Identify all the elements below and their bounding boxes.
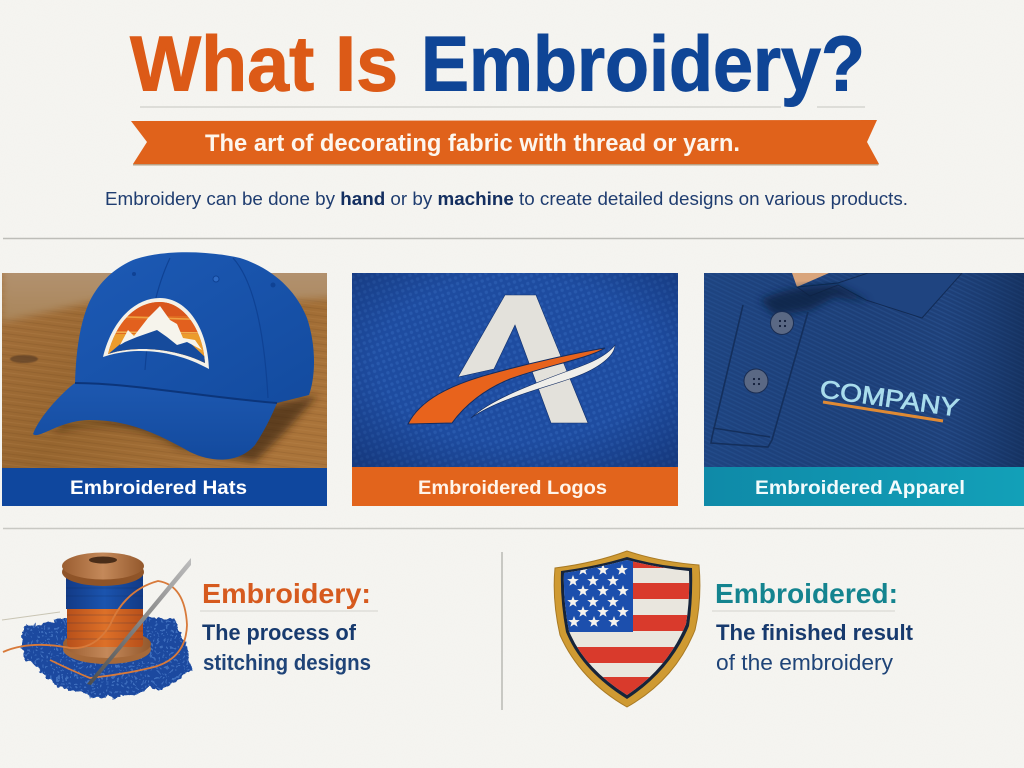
icon: blue cap <box>33 252 314 460</box>
needle <box>87 558 191 685</box>
photo: blue fabric with logo <box>352 273 678 468</box>
icon: thread spool and needle <box>2 552 192 698</box>
text block: embroidered: of the embroidery <box>716 650 893 675</box>
banner: tagline: The art of decorating fabric with thread or yarn. <box>205 130 740 157</box>
placket <box>711 305 808 447</box>
text block: embroidered <box>712 578 914 675</box>
loose thread <box>3 581 187 678</box>
label bar <box>2 468 327 506</box>
flag <box>564 560 690 695</box>
icon: letter A <box>458 295 588 423</box>
label bar <box>704 467 1024 506</box>
skin at neck <box>792 273 829 287</box>
collar <box>797 273 962 318</box>
text block: embroidery: stitching designs <box>203 650 371 675</box>
spool bottom flange <box>63 634 151 664</box>
buttons <box>770 312 794 334</box>
title: What Is <box>130 20 398 108</box>
photo: navy polo shirt <box>704 273 1024 468</box>
panel: embroidered hats <box>2 252 335 506</box>
label bar: Embroidered Apparel <box>755 478 965 499</box>
banner: tagline <box>131 120 879 166</box>
icon: orange swoosh <box>408 348 605 424</box>
photo: wood background <box>2 265 335 468</box>
text block: embroidered: The finished result <box>716 620 914 645</box>
text block: embroidery <box>200 578 378 675</box>
thread body <box>67 605 143 647</box>
label bar: Embroidered Hats <box>70 478 247 499</box>
text block: embroidery: Embroidery: <box>202 578 371 609</box>
icon: mountain patch <box>103 298 209 369</box>
fabric patch <box>22 618 192 698</box>
icon: white swoosh <box>471 345 615 418</box>
shirt logo text: COMPANY <box>818 375 961 422</box>
panel: embroidered logos <box>352 273 678 506</box>
title: Embroidery? <box>421 20 865 108</box>
label bar: Embroidered Logos <box>418 478 607 499</box>
panel: embroidered apparel <box>704 273 1024 506</box>
spool top flange <box>62 558 144 586</box>
title <box>130 20 865 108</box>
text block: embroidered: Embroidered: <box>715 578 898 609</box>
label bar <box>352 467 678 506</box>
intro text: Embroidery can be done by hand or by machine to create detailed designs on various products. <box>105 189 908 209</box>
text block: embroidery: The process of <box>202 620 357 645</box>
icon: shield flag patch <box>554 551 700 707</box>
